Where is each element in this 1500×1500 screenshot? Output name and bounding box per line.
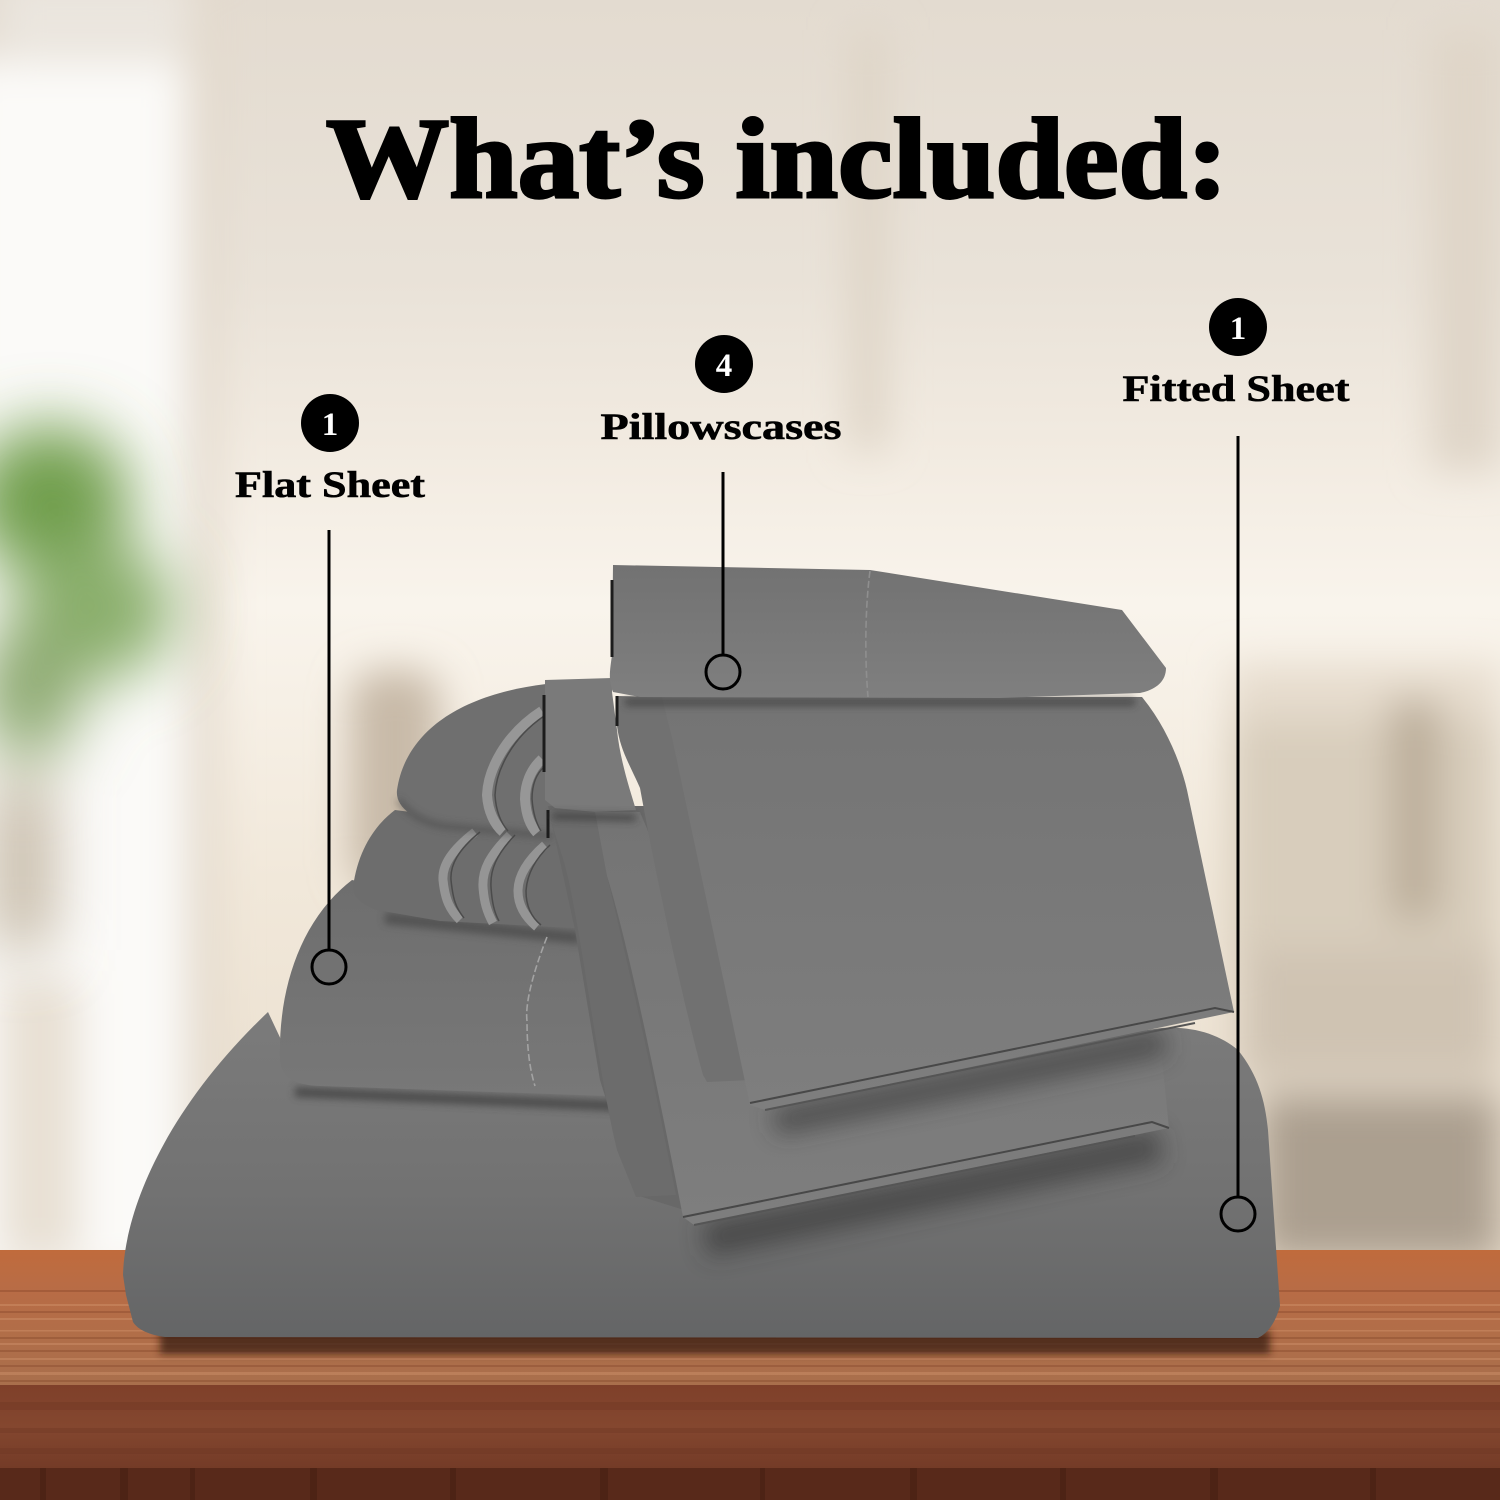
lower rounded pillowcase xyxy=(353,810,610,930)
label: fitted sheet: Fitted Sheet xyxy=(1122,369,1350,410)
callout: fitted sheet xyxy=(1122,298,1350,1231)
lower pillowcase: back fold xyxy=(548,810,676,1197)
bedding stack xyxy=(123,565,1280,1338)
badge: 4: 4 xyxy=(716,348,732,384)
callout: flat sheet xyxy=(235,394,426,984)
label: flat sheet: Flat Sheet xyxy=(235,465,426,506)
title: What’s included: xyxy=(326,95,1228,222)
wooden table xyxy=(0,1250,1500,1500)
lower pillowcase: front flap xyxy=(595,812,1169,1225)
badge: 1: 1 xyxy=(1230,311,1246,347)
small folded pillowcase xyxy=(544,678,636,838)
shadow: under top pillowcase xyxy=(625,698,1135,706)
badge: 1 xyxy=(1209,298,1267,356)
shadow: under upper flap xyxy=(775,1042,1165,1122)
upper pillowcase: front flap xyxy=(662,697,1234,1110)
pointer: flat sheet xyxy=(312,530,346,984)
badge: 4 xyxy=(695,335,753,393)
fitted sheet xyxy=(123,1012,1280,1338)
badge: 1: 1 xyxy=(322,407,338,443)
backing behind pillowcase folds xyxy=(548,806,770,1215)
flat sheet xyxy=(280,880,640,1100)
pointer: fitted sheet xyxy=(1221,436,1255,1231)
upper rounded pillowcase xyxy=(397,684,575,836)
shadow: under lower flap xyxy=(705,1145,1160,1240)
upper pillowcase: back fold xyxy=(617,696,752,1082)
callout: pillowcases xyxy=(600,335,842,689)
pointer: pillowcases xyxy=(706,472,740,689)
top pillowcase xyxy=(610,565,1166,726)
label: pillowcases: Pillowscases xyxy=(600,407,842,448)
badge: 1 xyxy=(301,394,359,452)
